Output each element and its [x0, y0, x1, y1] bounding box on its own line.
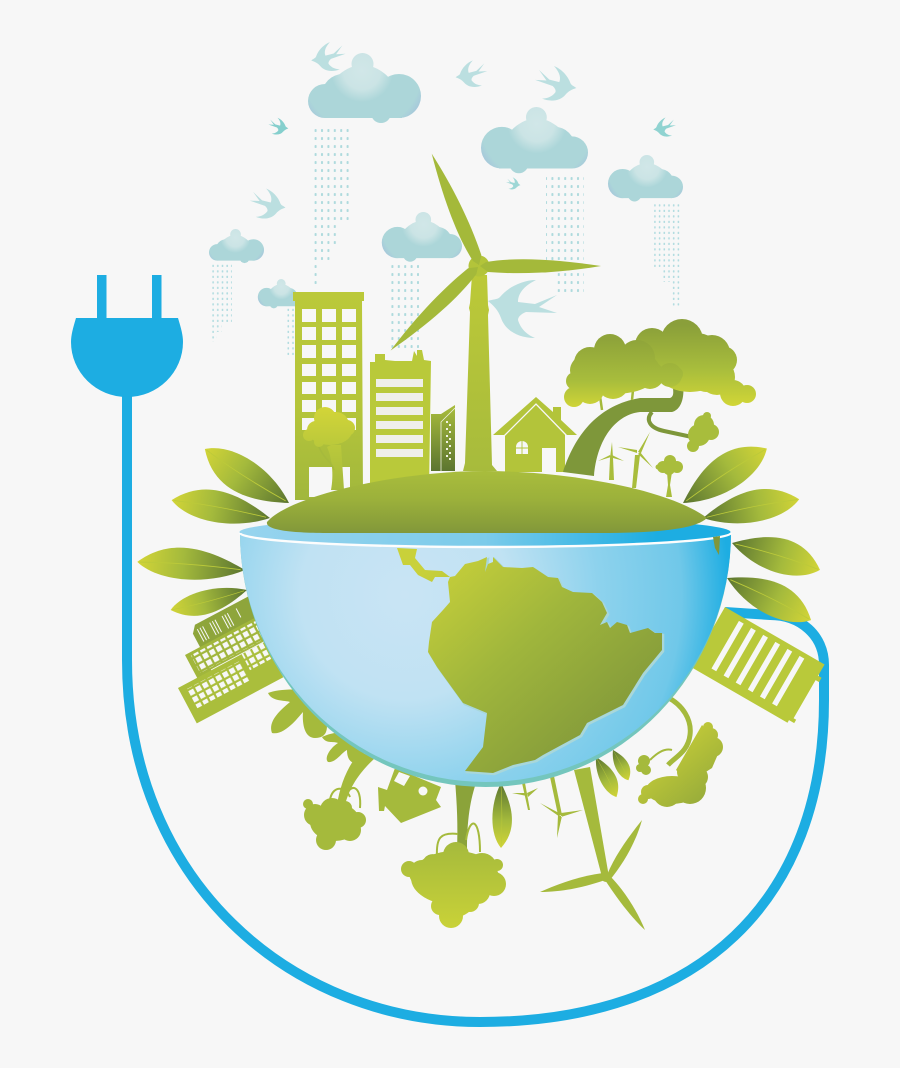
leaf over cord — [720, 561, 819, 633]
lower left tree — [303, 752, 375, 850]
upside-down house — [378, 768, 441, 823]
office tower — [293, 292, 364, 500]
leaves behind globe — [136, 432, 826, 623]
lower vegetation behind globe — [268, 689, 364, 763]
central america — [397, 548, 450, 582]
clouds — [209, 53, 683, 308]
wind turbine — [386, 151, 601, 471]
plug — [71, 275, 183, 397]
house — [493, 397, 577, 474]
land halo — [430, 558, 664, 774]
water surface — [240, 517, 730, 547]
south america — [428, 557, 662, 773]
swallows — [245, 38, 679, 338]
lower-left buildings — [177, 595, 283, 723]
bottom small leaves — [492, 747, 635, 848]
island at rim — [713, 536, 720, 555]
hill — [267, 471, 707, 533]
right building — [690, 607, 828, 726]
glass skyscraper — [431, 405, 455, 472]
big tree — [563, 319, 756, 476]
apartment block — [370, 350, 431, 490]
globe bowl — [240, 533, 731, 787]
bottom big tree — [401, 780, 506, 928]
power cord — [127, 390, 824, 1022]
lower right tree — [636, 697, 723, 807]
tree in front of office tower — [303, 407, 355, 490]
bottom turbines — [512, 767, 645, 930]
small turbines and tree on hill — [598, 432, 683, 497]
rain showers — [212, 126, 681, 357]
